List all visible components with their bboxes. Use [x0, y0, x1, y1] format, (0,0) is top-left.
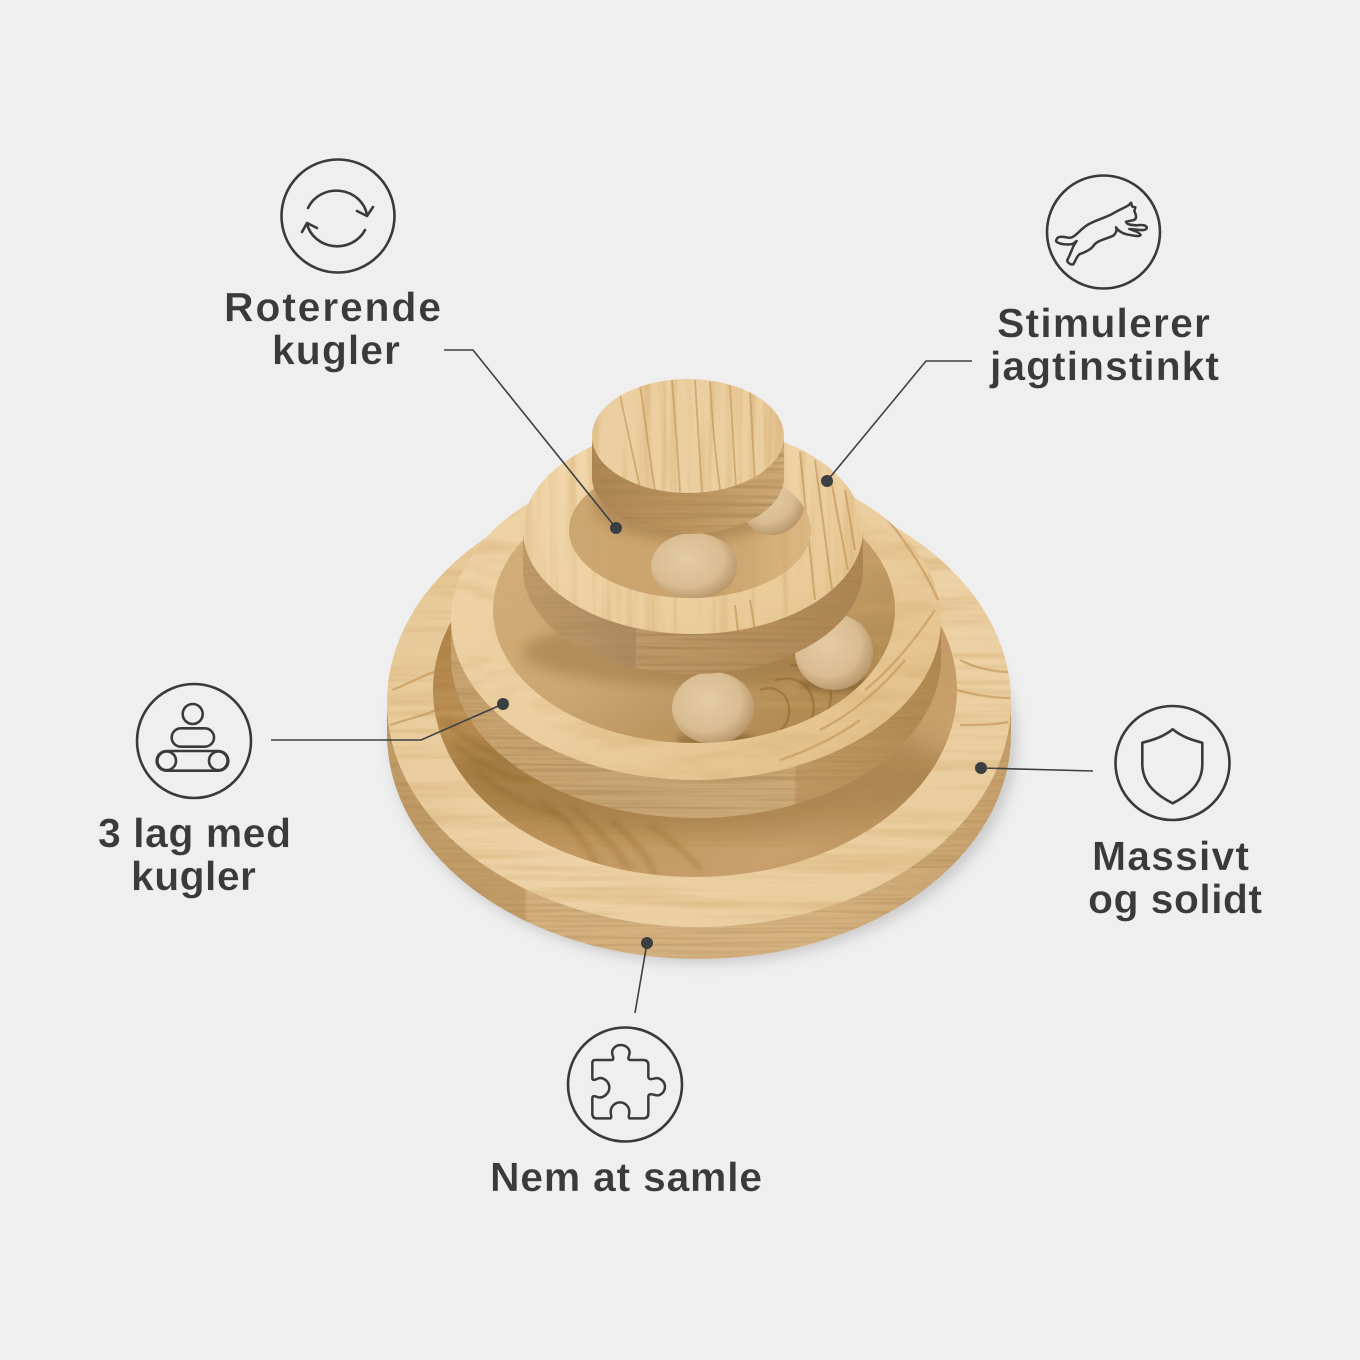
leader dot: solid build	[975, 762, 987, 774]
product photo: wooden three-tier cat toy	[380, 378, 1020, 970]
label: Massivt og solidt: Massivt	[1092, 833, 1249, 879]
label: Roterende kugler	[224, 284, 441, 373]
label: Stimulerer jagtinstinkt	[989, 300, 1219, 389]
icon: rotating arrows	[282, 160, 394, 272]
leader dot: hunting instinct	[821, 475, 833, 487]
label: Roterende kugler: Roterende	[224, 284, 441, 330]
label: Stimulerer jagtinstinkt: Stimulerer	[997, 300, 1210, 346]
icon: puzzle piece	[568, 1028, 682, 1142]
ball: right lower tier	[795, 614, 873, 690]
callout: hunting instinct	[821, 176, 1219, 487]
top disc	[590, 378, 786, 536]
label: Roterende kugler: kugler	[272, 327, 400, 373]
label: Stimulerer jagtinstinkt: jagtinstinkt	[989, 343, 1219, 389]
label: 3 lag med kugler	[98, 810, 291, 899]
callout: easy assembly	[490, 937, 762, 1200]
tier 2 bowl	[451, 498, 941, 818]
base plate	[387, 527, 1011, 959]
leader line: easy assembly	[635, 943, 647, 1013]
icon: jumping cat	[1047, 176, 1160, 288]
tier 3 bowl	[520, 425, 865, 675]
leader dot: rotating balls	[610, 522, 622, 534]
shadow under toy	[391, 520, 1017, 964]
leader line: solid build	[981, 768, 1093, 771]
label: Nem at samle: Nem at samle	[490, 1154, 762, 1200]
callout: rotating balls	[224, 160, 622, 534]
label: Massivt og solidt: og solidt	[1088, 876, 1262, 922]
label: Massivt og solidt	[1088, 833, 1262, 922]
icon: shield	[1116, 706, 1230, 820]
leader dot: easy assembly	[641, 937, 653, 949]
label: 3 lag med kugler: 3 lag med	[98, 810, 291, 856]
ball: behind top disc	[744, 476, 804, 535]
ball: front upper tier	[651, 533, 737, 599]
leader dot: three layers	[497, 698, 509, 710]
leader line: rotating balls	[444, 350, 616, 528]
callout: three layers	[98, 684, 509, 899]
icon: stacked layers	[137, 684, 251, 798]
callout: solid build	[975, 706, 1262, 922]
label: 3 lag med kugler: kugler	[131, 853, 256, 899]
leader line: three layers	[271, 704, 503, 740]
ball: front lower tier	[672, 672, 754, 744]
leader line: hunting instinct	[827, 361, 972, 481]
